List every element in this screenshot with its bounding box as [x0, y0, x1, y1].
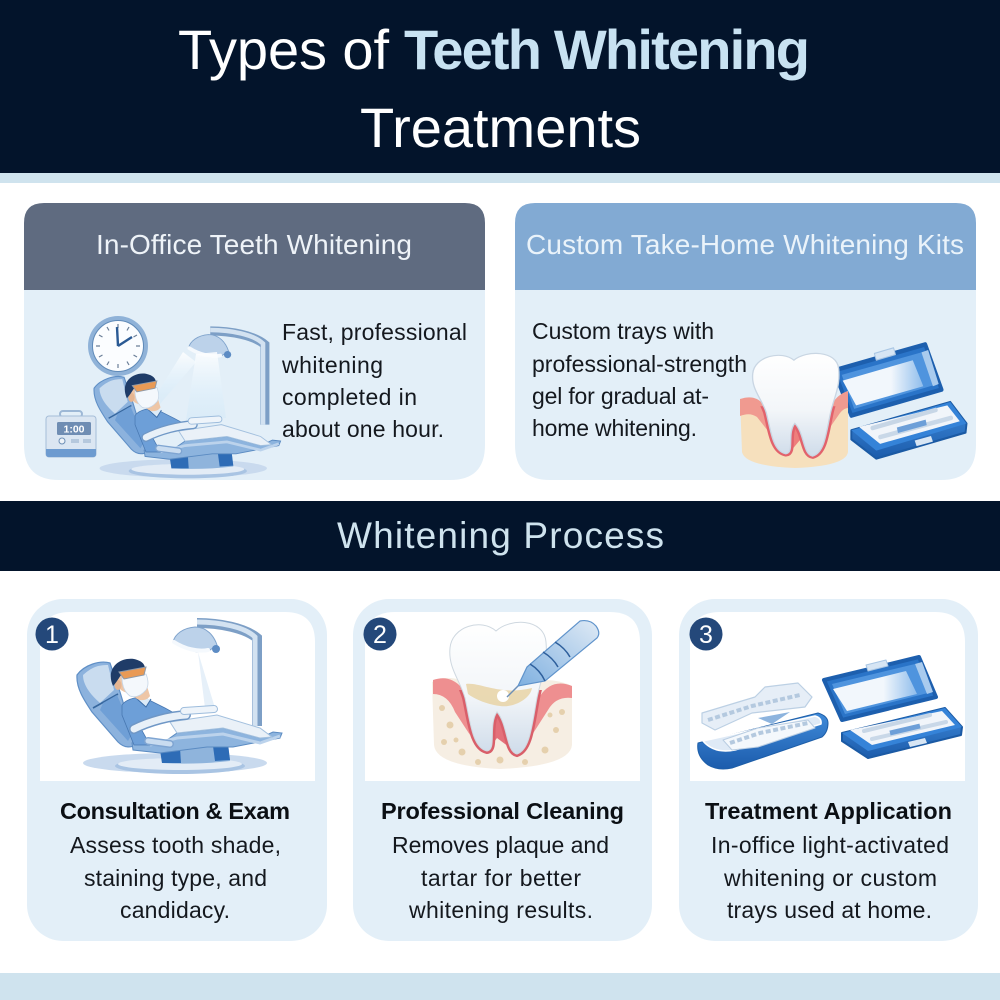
icon: timer device: 1:00 [63, 424, 85, 436]
panel text: home whitening. [532, 415, 697, 441]
card text [711, 832, 949, 923]
panel text: professional-strength [532, 351, 747, 377]
icon: timer device [46, 411, 96, 457]
title: Treatments [360, 96, 641, 159]
illustration: tooth in gum [740, 353, 848, 468]
illustration: patient in dental chair under light [94, 330, 281, 478]
panel text: Custom trays with [532, 318, 714, 344]
panel heading bar [515, 203, 976, 290]
panel text: gel for gradual at- [532, 383, 709, 409]
card background [27, 599, 327, 941]
card 3: treatment application [679, 599, 978, 941]
step number 3 [690, 618, 722, 650]
panel text: Fast, professional [282, 319, 467, 345]
step number 3: 3 [699, 621, 713, 649]
section band: whitening process [0, 501, 1000, 571]
panel heading: In-Office Teeth Whitening [96, 229, 412, 260]
section heading: Whitening Process [337, 515, 664, 556]
card heading: Professional Cleaning [381, 798, 624, 824]
icon: wall clock [88, 316, 148, 376]
card text [70, 832, 281, 923]
title: Teeth Whitening [404, 18, 810, 81]
card 1: consultation and exam [27, 599, 327, 941]
card 2: professional cleaning [353, 599, 652, 941]
card image area [40, 612, 315, 781]
card text: whitening results. [408, 897, 593, 923]
card text: trays used at home. [727, 897, 932, 923]
card heading: Treatment Application [705, 798, 952, 824]
panel text [532, 318, 747, 441]
panel text: whitening [281, 352, 383, 378]
card text: candidacy. [120, 897, 230, 923]
footer band [0, 973, 1000, 1000]
illustration: whitening trays in open case [698, 657, 962, 769]
card text: Assess tooth shade, [70, 832, 281, 858]
card text: Removes plaque and [392, 832, 609, 858]
card text: tartar for better [421, 865, 581, 891]
panel: in-office teeth whitening [24, 203, 485, 480]
step number 2: 2 [373, 621, 387, 649]
card background [679, 599, 978, 941]
panel text [281, 319, 467, 442]
card image area [365, 612, 640, 781]
panel body [515, 285, 976, 480]
panel body [24, 285, 485, 480]
step number 1: 1 [45, 621, 59, 649]
card heading: Consultation & Exam [60, 798, 290, 824]
title [178, 18, 810, 159]
card background [353, 599, 652, 941]
panel text: completed in [282, 384, 417, 410]
card text: staining type, and [84, 865, 267, 891]
panel: custom take-home whitening kits [515, 203, 976, 480]
card text: whitening or custom [723, 865, 937, 891]
illustration: patient in dental chair [77, 622, 282, 774]
illustration: whitening kit case [834, 344, 967, 459]
panel text: about one hour. [282, 416, 444, 442]
card text: In-office light-activated [711, 832, 949, 858]
header band [0, 0, 1000, 183]
card text [392, 832, 609, 923]
panel heading: Custom Take-Home Whitening Kits [526, 229, 964, 260]
illustration: tooth being cleaned [432, 621, 599, 769]
title: Types of [178, 18, 389, 81]
card image area [690, 612, 965, 781]
step number 2 [364, 618, 396, 650]
step number 1 [36, 618, 68, 650]
panel heading bar [24, 203, 485, 290]
